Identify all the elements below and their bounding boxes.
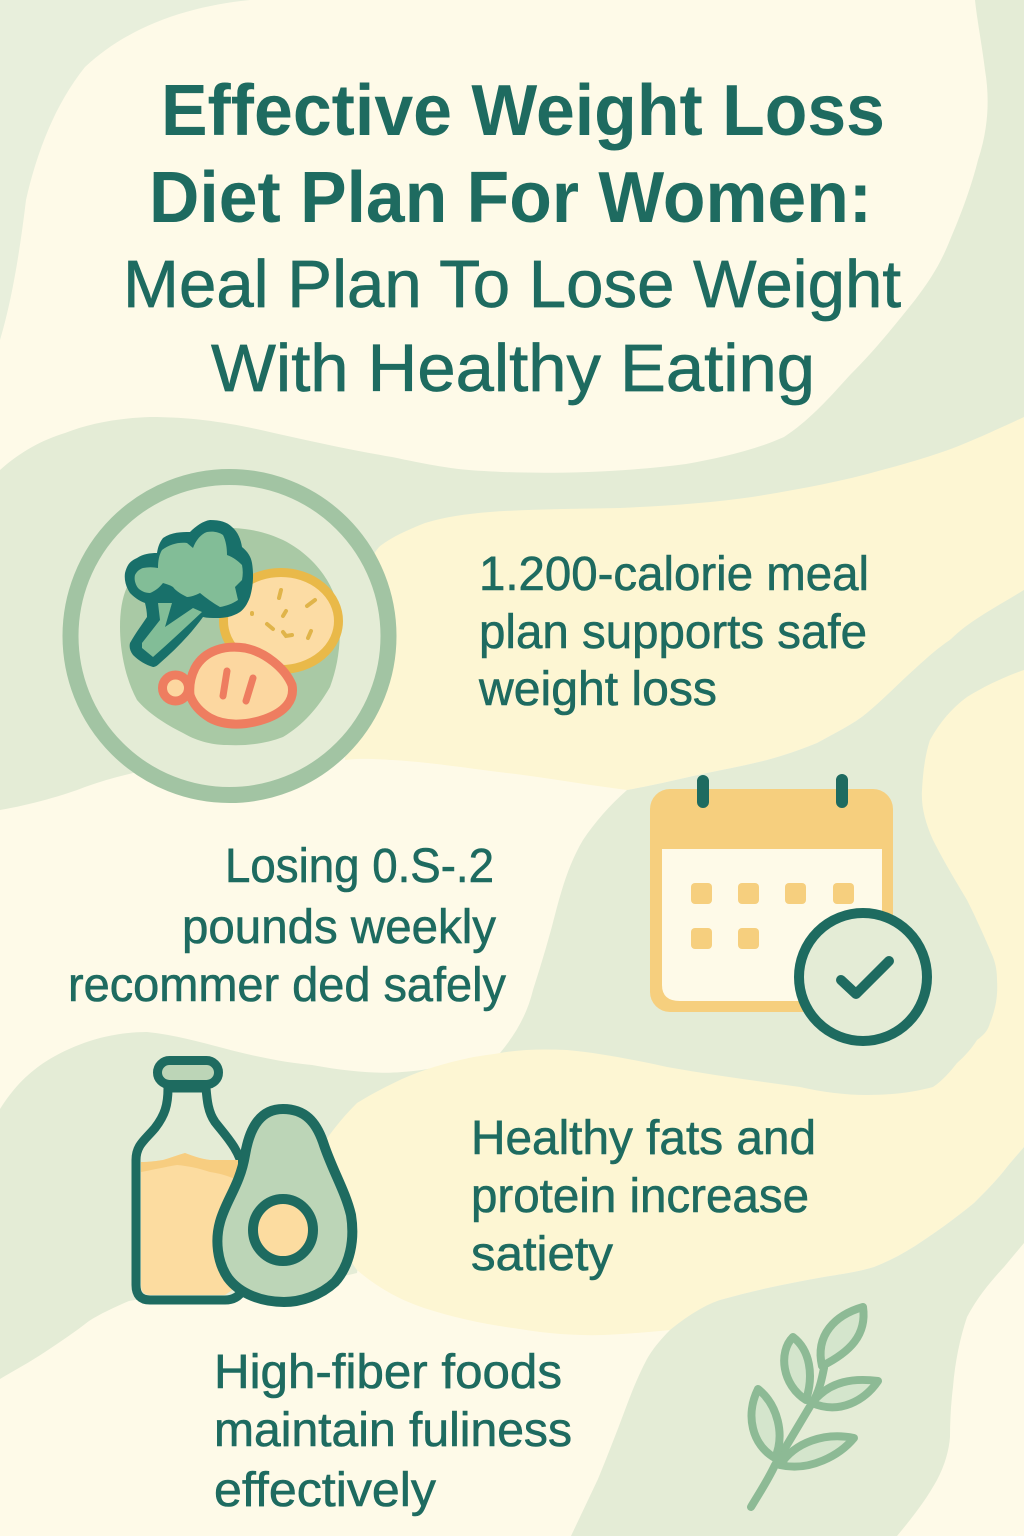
title: Meal Plan To Lose Weight [123, 247, 901, 322]
text: weekly weight loss: pounds weekly [182, 901, 496, 954]
text: weekly weight loss: Losing 0.S-.2 [225, 840, 494, 893]
text: calorie meal plan [478, 548, 869, 716]
title: Diet Plan For Women: [149, 158, 872, 238]
bottle [136, 1060, 243, 1300]
title [123, 71, 901, 406]
text: high fiber: maintain fuliness [214, 1404, 572, 1457]
icon: oil bottle and avocado [136, 1060, 352, 1302]
text: healthy fats [471, 1112, 816, 1281]
text: weekly weight loss [68, 840, 506, 1012]
text: weekly weight loss: recommer ded safely [68, 959, 506, 1012]
broccoli [125, 520, 253, 667]
text: calorie meal plan: 1.200-calorie meal [479, 548, 869, 601]
meat [162, 647, 293, 724]
icon: plate of food [70, 477, 388, 795]
text: high fiber: High-fiber foods [214, 1346, 562, 1399]
text: calorie meal plan: plan supports safe [479, 606, 867, 659]
text: high fiber: effectively [214, 1464, 436, 1517]
title: Effective Weight Loss [161, 71, 885, 151]
text: healthy fats: satiety [471, 1228, 613, 1281]
potato [224, 572, 338, 670]
text: calorie meal plan: weight loss [478, 663, 717, 716]
text: healthy fats: protein increase [471, 1170, 809, 1223]
icon: calendar with check [650, 780, 927, 1041]
icon: leafy sprig [751, 1307, 878, 1507]
title: With Healthy Eating [211, 331, 815, 406]
text: healthy fats: Healthy fats and [471, 1112, 816, 1165]
avocado [217, 1109, 352, 1302]
text: high fiber [214, 1346, 572, 1517]
